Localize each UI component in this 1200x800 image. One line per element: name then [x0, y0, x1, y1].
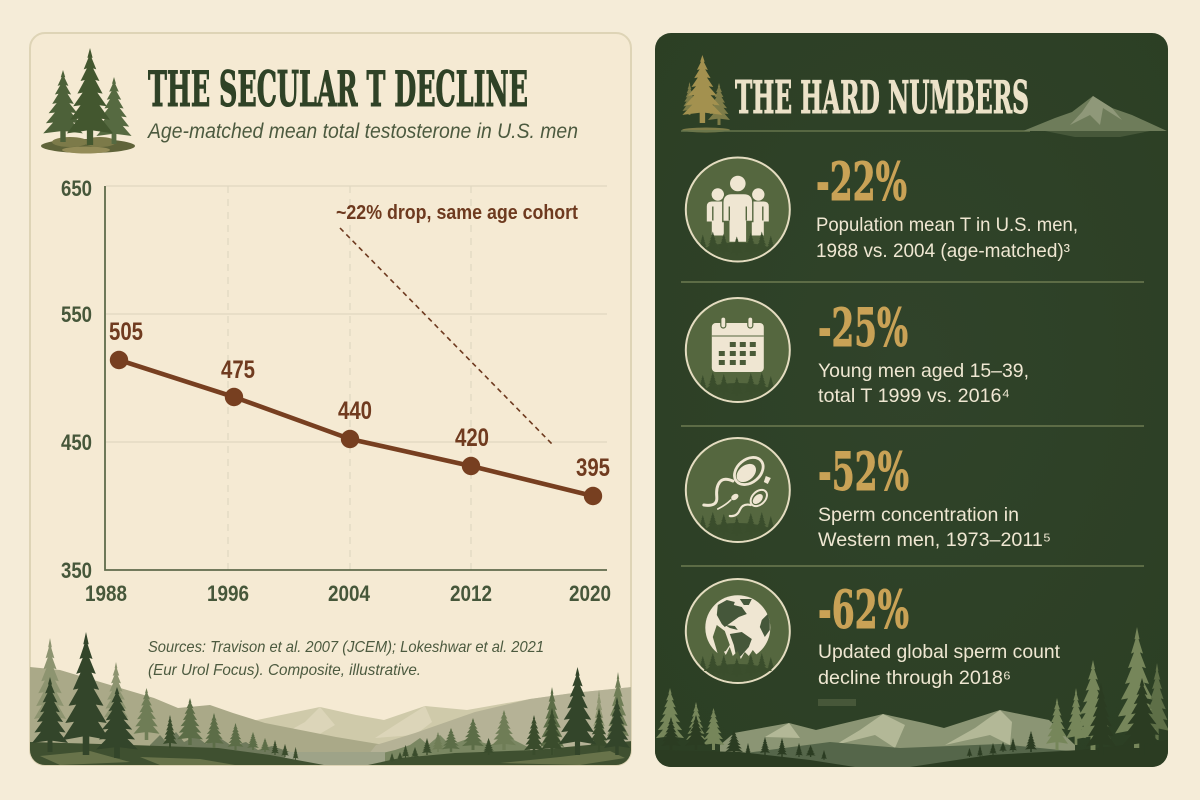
- icon: globe: [686, 579, 790, 694]
- stat value: -22%: [816, 152, 907, 213]
- data line: [119, 360, 593, 496]
- panel: secular T decline: [30, 33, 632, 765]
- icon: header mountain: [1023, 96, 1167, 137]
- stat description: [818, 504, 1051, 551]
- stat row: -22%: [686, 152, 1078, 272]
- header rule: [681, 130, 1030, 132]
- illustration: forest and mountain footer: [655, 627, 1169, 767]
- y axis labels: 350: [61, 558, 92, 583]
- data value labels: 395: [576, 454, 610, 482]
- title: THE SECULAR T DECLINE: [148, 60, 528, 118]
- stat row: -62%: [686, 579, 1061, 694]
- icon: calendar: [686, 298, 790, 413]
- data points: [110, 351, 602, 505]
- icon: pine trees: [41, 48, 135, 154]
- stat description: [818, 360, 1029, 407]
- stat row: -52%: [686, 438, 1051, 553]
- data value labels: 420: [455, 424, 489, 452]
- stat description: decline through 2018⁶: [818, 667, 1011, 689]
- stat description: Updated global sperm count: [818, 641, 1061, 663]
- stat value: -52%: [818, 442, 909, 503]
- annotation: dashed trend line: [340, 228, 553, 445]
- sources note: (Eur Urol Focus). Composite, illustrative.: [148, 662, 421, 679]
- x axis labels: 1996: [207, 581, 249, 606]
- panel: the hard numbers: [655, 33, 1169, 767]
- icon: three people: [686, 158, 790, 272]
- sources note: [148, 639, 544, 679]
- x axis labels: 2020: [569, 581, 611, 606]
- y axis labels: [61, 176, 92, 583]
- subtitle: Age-matched mean total testosterone in U.S. men: [146, 120, 578, 143]
- stat description: Population mean T in U.S. men,: [816, 214, 1078, 236]
- stat description: [818, 641, 1061, 689]
- icon: header tree: [682, 55, 730, 132]
- data value labels: 505: [109, 318, 143, 346]
- stat description: total T 1999 vs. 2016⁴: [818, 385, 1010, 407]
- annotation: drop callout: ~22% drop, same age cohort: [336, 202, 578, 224]
- data value labels: 440: [338, 397, 372, 425]
- line chart: [61, 176, 611, 606]
- x axis labels: 2004: [328, 581, 371, 606]
- sources note: Sources: Travison et al. 2007 (JCEM); Lokeshwar et al. 2021: [148, 639, 544, 656]
- stat description: Sperm concentration in: [818, 504, 1019, 526]
- y axis labels: 450: [61, 430, 92, 455]
- stat description: 1988 vs. 2004 (age-matched)³: [816, 240, 1070, 262]
- icon: sperm: [686, 438, 790, 553]
- stat description: Young men aged 15–39,: [818, 360, 1029, 382]
- data value labels: 475: [221, 356, 255, 384]
- x axis labels: 1988: [85, 581, 127, 606]
- stat description: Western men, 1973–2011⁵: [818, 529, 1051, 551]
- x axis labels: [85, 581, 611, 606]
- stat value: -62%: [818, 580, 909, 641]
- chart axes: [105, 186, 607, 570]
- y axis labels: 650: [61, 176, 92, 201]
- stat value: -25%: [818, 298, 908, 359]
- illustration: forest and mountain footer: [30, 632, 632, 765]
- y axis labels: 550: [61, 302, 92, 327]
- x axis labels: 2012: [450, 581, 492, 606]
- stat description: [816, 214, 1078, 262]
- data value labels: [109, 318, 610, 482]
- stat row: -25%: [686, 298, 1029, 413]
